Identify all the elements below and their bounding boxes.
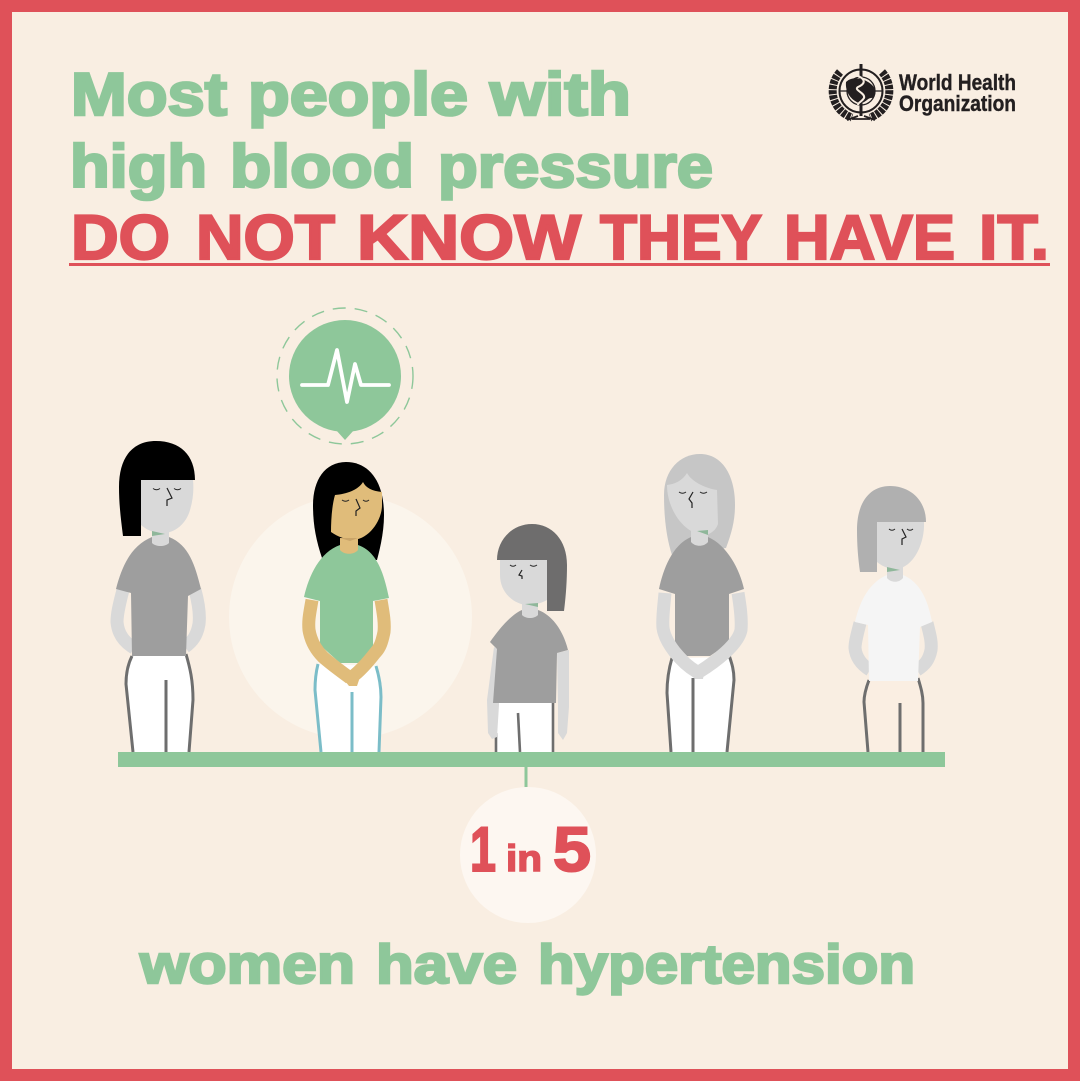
caption: women have hypertension: hypertension [538, 933, 915, 995]
title: blood [230, 133, 414, 200]
woman 2: highlighted with hypertension [304, 462, 389, 752]
caption: women have hypertension [139, 933, 915, 995]
title [69, 61, 1050, 273]
caption: women have hypertension: women [139, 933, 355, 995]
title: Most [71, 61, 227, 128]
title: NOT [196, 203, 335, 273]
title: IT. [979, 203, 1049, 273]
icon: heartbeat speech bubble [277, 308, 413, 444]
green baseline bar with stem [118, 752, 945, 787]
statistic: 1 in 5: in [506, 838, 542, 879]
title: HAVE [784, 203, 955, 273]
statistic: 1 in 5: 5 [553, 815, 591, 885]
highlight circle behind woman [229, 496, 472, 738]
woman 3: dark grey bob, arms at sides [487, 524, 569, 752]
statistic: 1 in 5: 1 [470, 815, 496, 885]
title: pressure [438, 133, 713, 200]
WHO logo: World Health [899, 70, 1016, 95]
title: high [70, 133, 207, 200]
title: KNOW [357, 203, 582, 273]
title: people [248, 61, 468, 128]
icon: WHO emblem [833, 64, 889, 120]
woman 5: grey bob, white shirt [855, 486, 932, 752]
title: THEY [600, 203, 762, 273]
title: with [489, 61, 631, 128]
WHO logo [833, 64, 1016, 120]
caption: women have hypertension: have [376, 933, 517, 995]
woman 1: black bob, grey shirt [116, 441, 201, 752]
statistic: 1 in 5 [460, 787, 596, 923]
WHO logo: Organization [899, 91, 1016, 116]
title: DO [71, 203, 170, 273]
woman 4: light grey long hair [659, 454, 744, 752]
